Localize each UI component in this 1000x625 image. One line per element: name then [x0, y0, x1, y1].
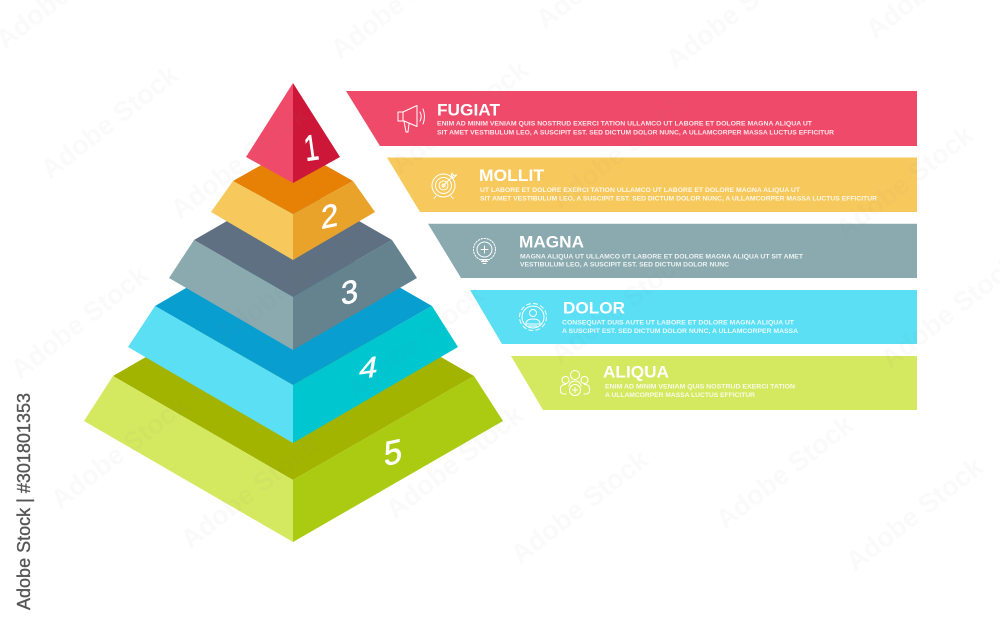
description: Aliqua: ENIM AD MINIM VENIAM QUIS NOSTRUD EXERCI TATION	[605, 384, 795, 391]
banner: Dolor	[470, 290, 917, 344]
icon: megaphone	[398, 106, 424, 132]
heading: Mollit: MOLLIT	[479, 166, 545, 185]
icon: light bulb	[474, 238, 496, 264]
heading: Magna: MAGNA	[519, 232, 584, 251]
vertical stock credit: Adobe Stock | #301801353	[14, 393, 34, 610]
stock watermark pattern: Adobe Stock	[165, 99, 315, 225]
icon: target	[432, 173, 456, 198]
pyramid tier 5	[84, 272, 503, 542]
description: Dolor: A SUSCIPIT EST. SED DICTUM DOLOR NUNC, A ULLAMCORPER MASSA	[562, 328, 798, 335]
icon: group of people	[560, 370, 590, 396]
description: Dolor	[562, 320, 798, 335]
stock watermark pattern: Adobe Stock	[175, 429, 325, 555]
description: Fugiat: ENIM AD MINIM VENIAM QUIS NOSTRUD EXERCI TATION ULLAMCO UT LABORE ET DOLORE MAGNA ALIQUA UT	[437, 121, 812, 128]
description: Mollit: UT LABORE ET DOLORE EXERCI TATION ULLAMCO UT LABORE ET DOLORE MAGNA ALIQUA UT	[480, 187, 800, 194]
pyramid tier 4: 4	[357, 350, 381, 386]
icon: gear with person	[520, 304, 546, 330]
description: Mollit: SIT AMET VESTIBULUM LEO, A SUSCIPIT EST. SED DICTUM DOLOR NUNC, A ULLAMCORPER MASSA LUCTUS EFFICITUR	[480, 195, 877, 202]
pyramid tier 3	[169, 183, 417, 350]
stock watermark pattern: Adobe Stock	[830, 119, 980, 245]
description: Mollit	[480, 187, 877, 202]
description: Fugiat: SIT AMET VESTIBULUM LEO, A SUSCIPIT EST. SED DICTUM DOLOR NUNC, A ULLAMCORPER MASSA LUCTUS EFFICITUR	[437, 129, 834, 136]
pyramid tier 2	[211, 147, 375, 260]
pyramid tier 4	[128, 226, 458, 443]
heading: Fugiat: FUGIAT	[437, 100, 501, 120]
description: Aliqua	[605, 384, 795, 399]
description: Dolor: CONSEQUAT DUIS AUTE UT LABORE ET DOLORE MAGNA ALIQUA UT	[562, 320, 794, 327]
stock watermark pattern: Adobe Stock	[340, 279, 490, 405]
pyramid tier 3: 3	[341, 272, 358, 312]
stock watermark pattern: Adobe Stock	[545, 89, 695, 215]
banner: Aliqua	[511, 356, 917, 410]
description: Magna: VESTIBULUM LEO, A SUSCIPIT EST. SED DICTUM DOLOR NUNC	[520, 262, 729, 269]
pyramid	[84, 83, 503, 542]
stock watermark pattern: Adobe Stock	[45, 389, 195, 515]
heading: Aliqua: ALIQUA	[603, 363, 669, 382]
description: Fugiat	[437, 121, 834, 136]
stock watermark pattern: Adobe Stock	[210, 224, 360, 350]
stock watermark pattern: Adobe Stock	[710, 409, 860, 535]
pyramid tier 2: 2	[321, 196, 338, 236]
pyramid tier 1	[246, 83, 340, 183]
stock watermark pattern: Adobe Stock	[380, 399, 530, 525]
stock watermark pattern: Adobe Stock	[385, 54, 535, 180]
banner: Mollit	[387, 158, 917, 212]
stock watermark pattern: Adobe Stock	[5, 259, 155, 385]
stock watermark pattern: Adobe Stock	[505, 444, 655, 570]
stock watermark pattern: Adobe Stock	[840, 451, 990, 577]
banner: Fugiat	[346, 91, 917, 146]
description: Magna	[520, 253, 803, 269]
stock watermark pattern: Adobe Stock	[545, 244, 695, 370]
description: Magna: MAGNA ALIQUA UT ULLAMCO UT LABORE ET DOLORE MAGNA ALIQUA UT SIT AMET	[520, 253, 803, 260]
pyramid tier 1: 1	[301, 127, 321, 169]
stock watermark pattern: Adobe Stock	[35, 59, 185, 185]
heading: Dolor: DOLOR	[563, 299, 625, 318]
banner: Magna	[428, 224, 917, 278]
pyramid tier 5: 5	[384, 433, 402, 474]
description: Aliqua: A ULLAMCORPER MASSA LUCTUS EFFICITUR	[605, 392, 755, 399]
